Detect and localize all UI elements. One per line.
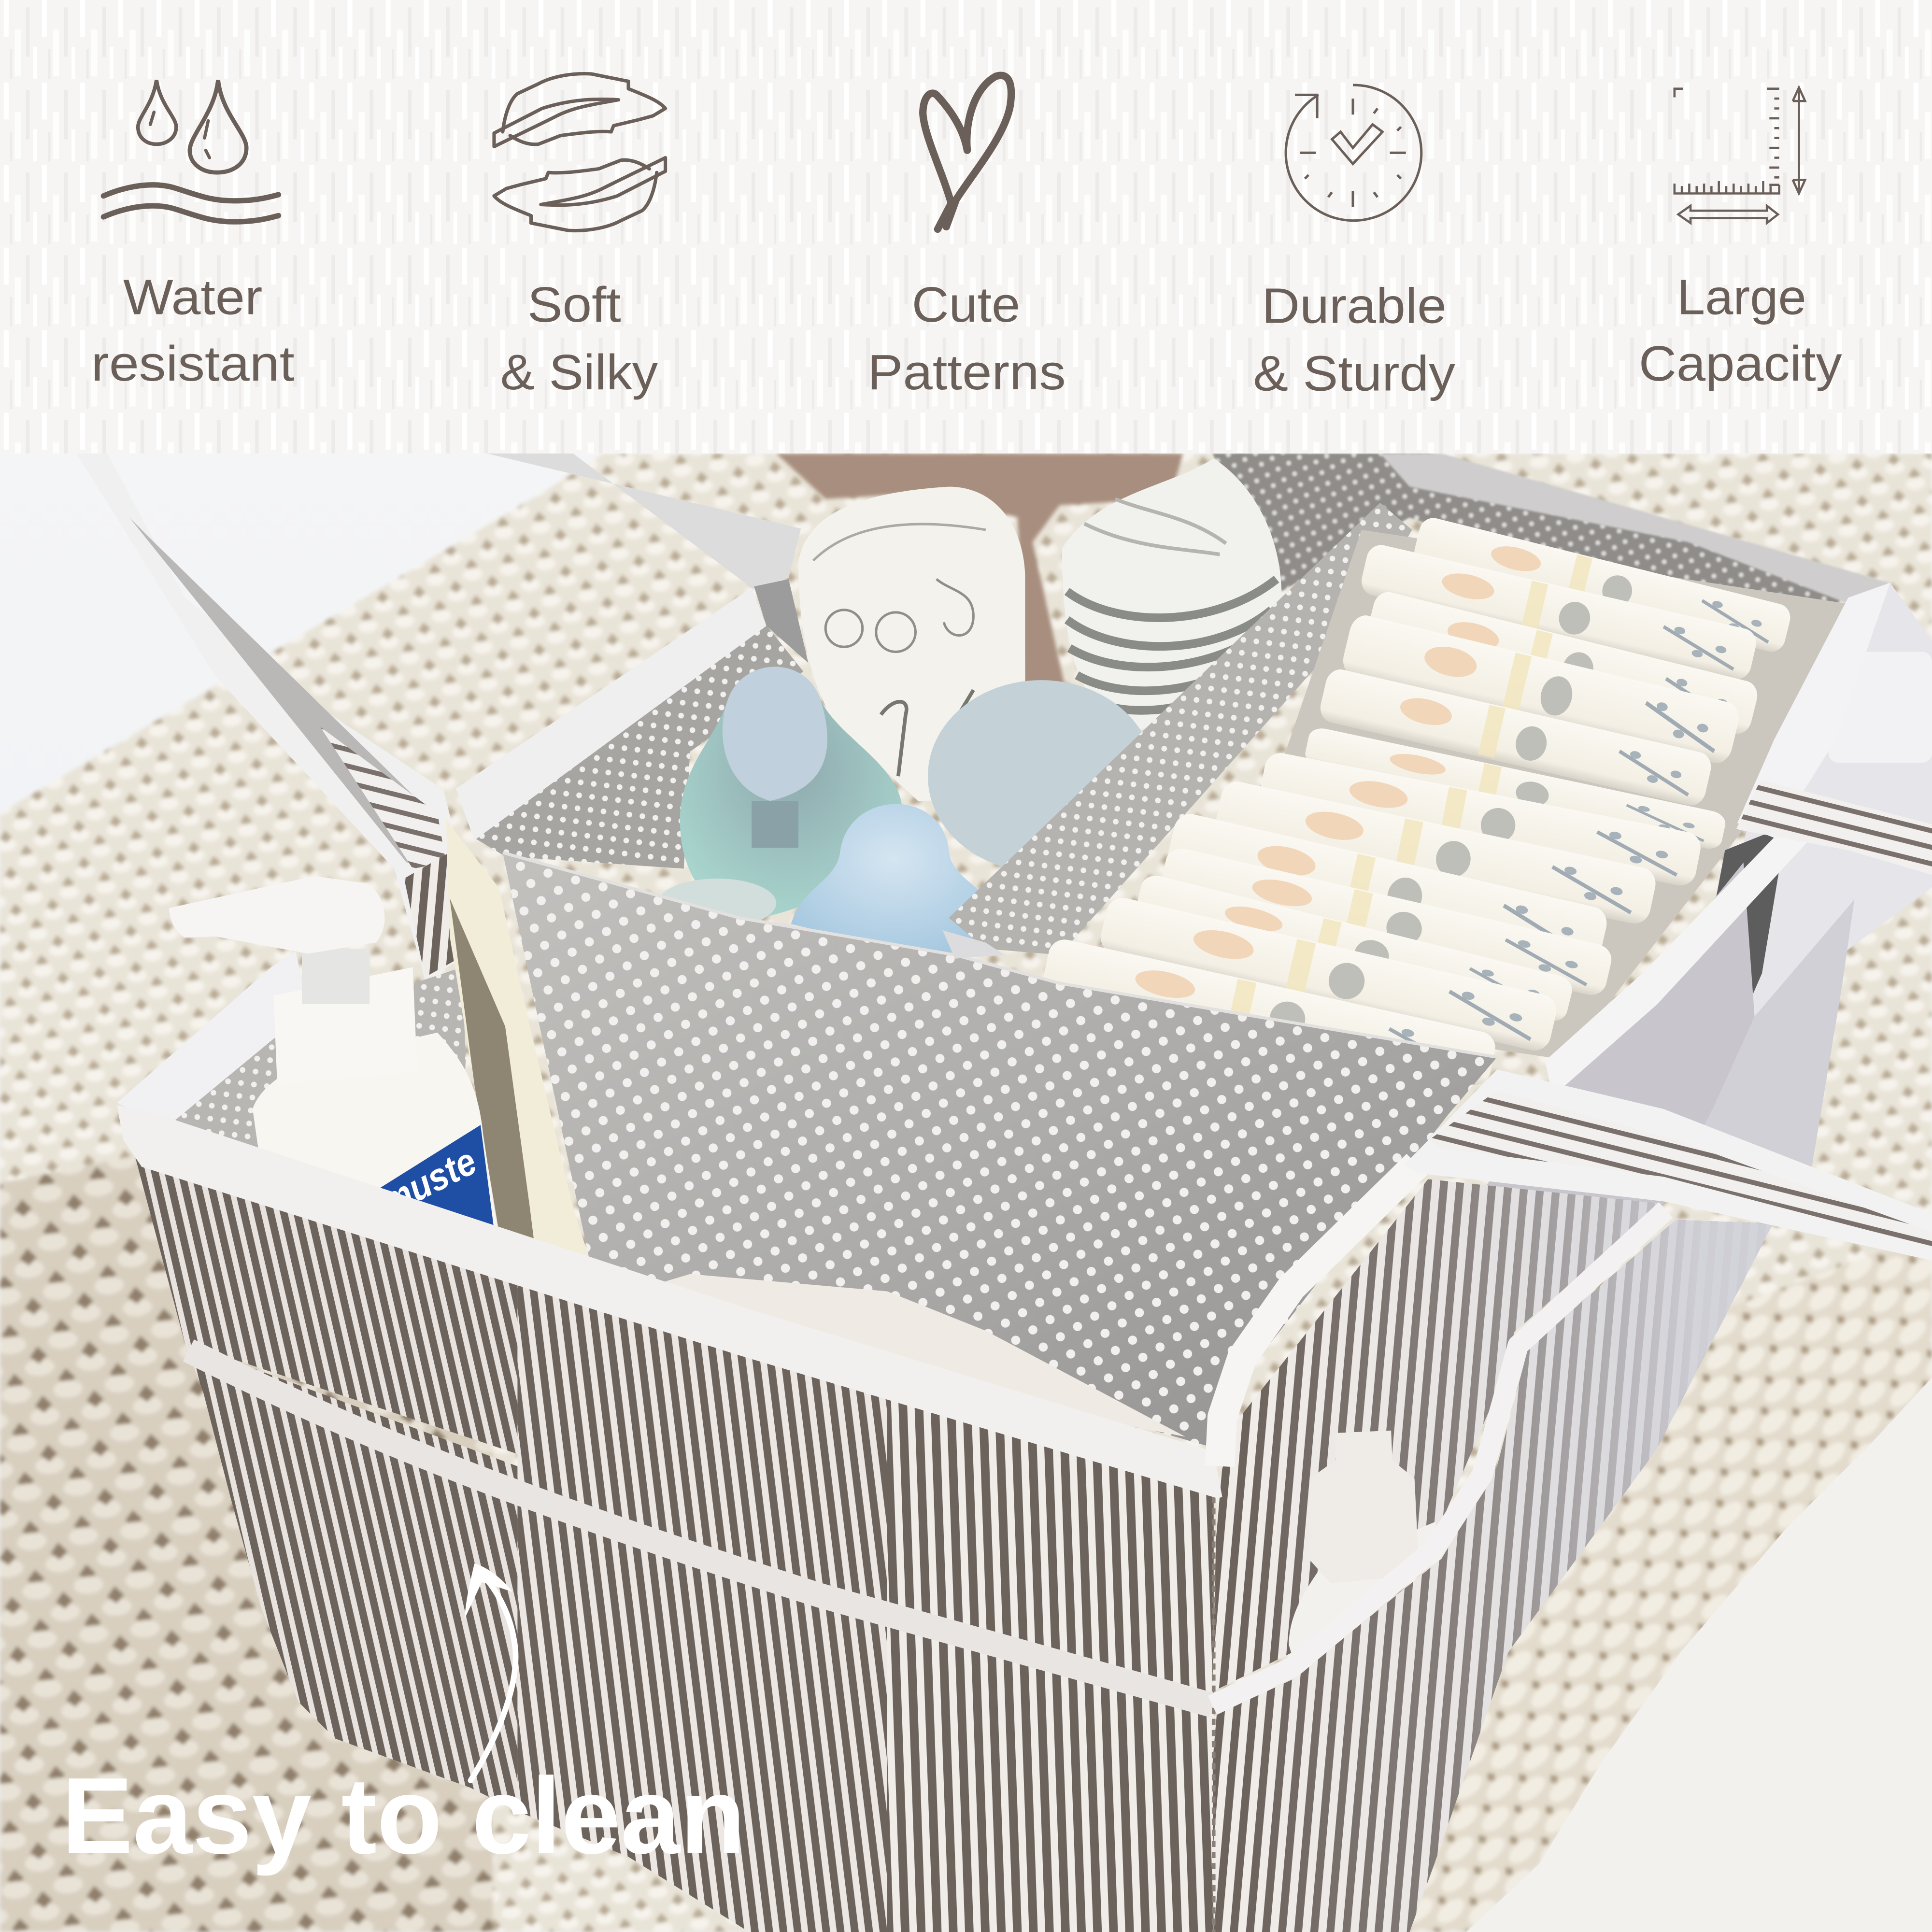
label: large capacity [1639,269,1842,391]
plush toy [776,454,1183,690]
top band with fabric texture [0,0,1932,454]
inner right wall stripes [1212,1179,1662,1692]
far right wall and gap [1478,583,1932,1232]
label: durable and sturdy: & Sturdy [1253,345,1455,401]
feature: large capacity [1639,87,1842,391]
small pacifier [658,879,776,928]
icon: heart [923,75,1011,229]
pump label [378,1125,496,1239]
second handle, right [1736,780,1932,875]
label: large capacity: Large [1677,269,1806,325]
divider [949,503,1412,955]
knitted rug [0,454,1932,1932]
rear-left strap [76,454,458,980]
bottle: blue nipple [791,804,995,961]
swaddle roll with animals [798,487,1025,801]
feature: soft and silky [494,74,666,400]
rear handle [487,454,801,588]
dotted front panel [503,852,1497,1448]
heading: easy to clean: Easy to clean [62,1755,745,1876]
feature: durable and sturdy [1253,85,1455,401]
pocket trim, right [1212,1210,1666,1705]
bottle: teal [680,667,902,918]
label: water resistant: Water [123,269,262,325]
arrow [465,1563,516,1780]
wall background [0,454,1932,1932]
folded tube [446,819,594,1273]
white floor [1466,1378,1932,1932]
label: water resistant [91,269,295,391]
label: cute patterns [867,276,1066,400]
photo: basket on knitted rug [0,454,1932,1932]
diapers [1040,515,1793,1088]
feature: water resistant [91,80,295,391]
bottle: pale rear [928,680,1154,872]
label: water resistant: resistant [91,335,295,391]
label: durable and sturdy [1253,277,1455,401]
right pocket stripes [1212,1220,1773,1932]
label: durable and sturdy: Durable [1262,277,1447,333]
front handle strap [1405,1069,1932,1261]
label: cute patterns: Patterns [867,344,1066,400]
feature: cute patterns [867,75,1066,400]
top rim, front [117,1105,1222,1498]
front wall, upper stripes [136,1158,1214,1706]
left inner wall [117,951,466,1232]
brand word: muste [373,1139,483,1223]
icon: water drops and waves [103,80,279,222]
label: soft and silky [500,276,658,400]
label: cute patterns: Cute [912,276,1020,332]
icon: clock with check [1286,85,1421,221]
rear-left compartment [456,579,808,868]
icon: feathers [494,74,666,231]
dropper bottle [1289,1431,1439,1657]
diaper bay [1060,530,1848,1060]
label: soft and silky: Soft [527,276,621,332]
rear wall of diaper section [1212,454,1848,659]
label: large capacity: Capacity [1639,335,1842,391]
label: soft and silky: & Silky [500,344,658,400]
lotion pump bottle [169,876,499,1239]
front wall, lower pocket stripes [185,1343,1214,1932]
icon: rulers and arrows [1675,87,1805,223]
pocket trim, front [188,1350,1212,1705]
striped swaddle roll [1062,458,1281,729]
wipes pack [666,1274,1185,1436]
top rim, right corner [1220,1165,1417,1466]
rear rim [1220,454,1890,604]
